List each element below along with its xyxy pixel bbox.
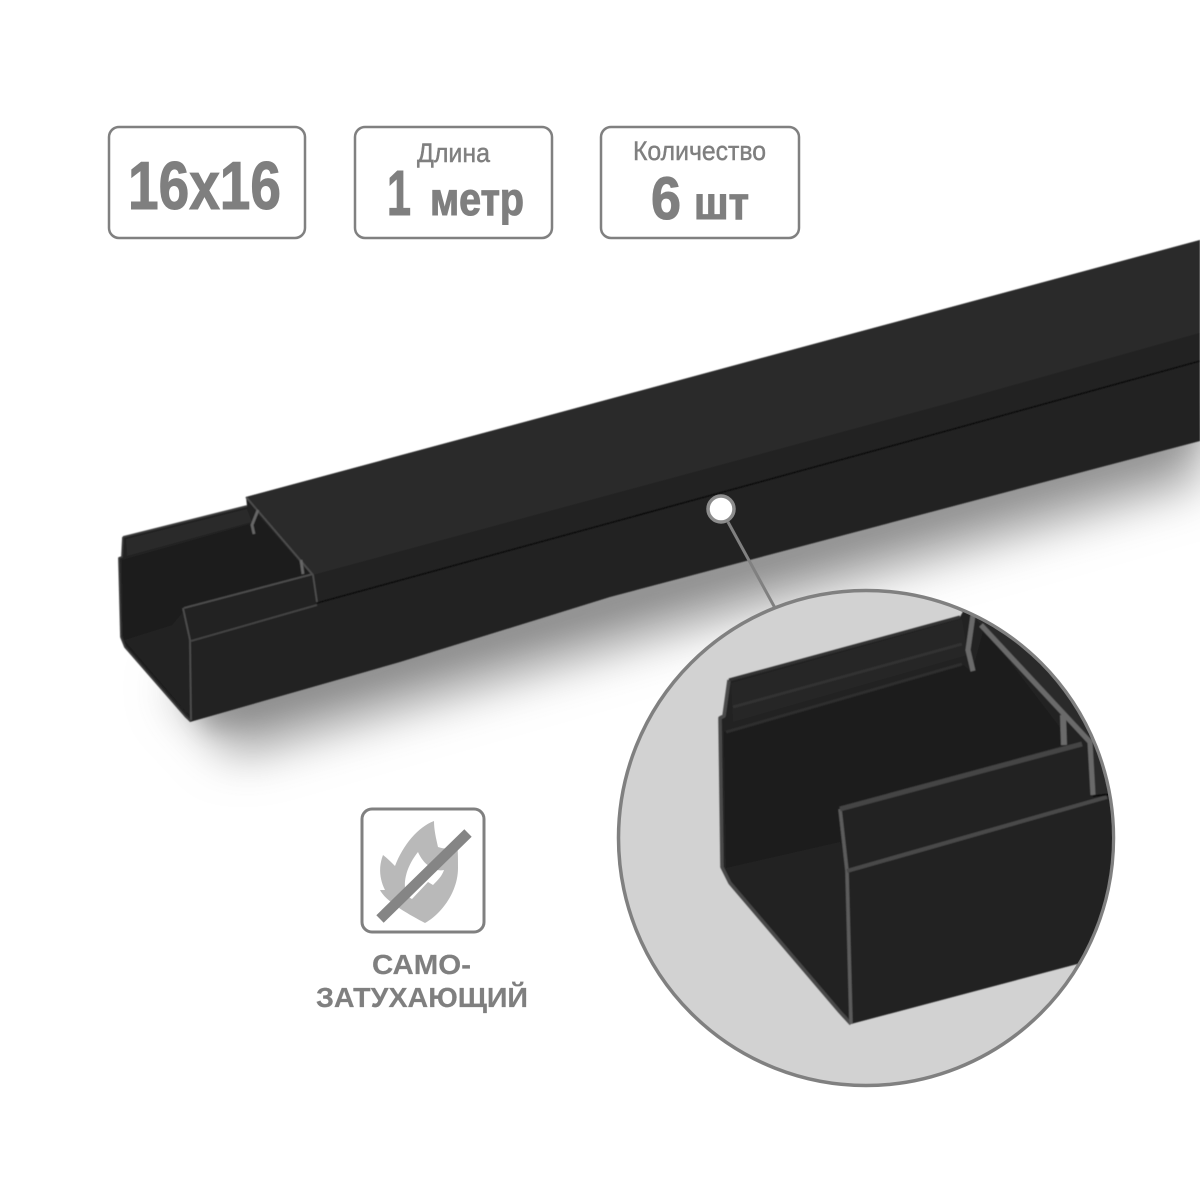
cover top face [246, 240, 1200, 575]
badge: quantity 6 pieces: Количество [633, 136, 766, 166]
badge: length 1 metre [355, 127, 552, 238]
label: self-extinguishing: ЗАТУХАЮЩИЙ [316, 981, 528, 1013]
magnified inset circle [618, 590, 1130, 1086]
channel front lip [183, 574, 317, 641]
black cable channel [119, 240, 1200, 722]
channel groove line [317, 361, 1200, 603]
flame shape [380, 821, 458, 923]
inset cover end piece [982, 622, 1107, 796]
badge: length 1 metre: метр [430, 173, 524, 225]
badge: quantity 6 pieces: 6 [651, 165, 681, 232]
label: self-extinguishing: САМО- [372, 949, 471, 980]
flame inner cutout [405, 852, 444, 899]
badge: size 16x16: 16x16 [128, 148, 281, 224]
inset interior [838, 740, 1060, 823]
inset floor [726, 842, 851, 1020]
inset back wall [731, 619, 968, 722]
channel edge highlights [119, 497, 317, 721]
infographic canvas [108, 126, 1200, 1088]
badge: length 1 metre: Длина [417, 138, 491, 168]
callout leader line [728, 522, 775, 608]
badge: size 16x16 [109, 127, 305, 238]
inset channel profile [720, 606, 1130, 1024]
slash across flame [380, 833, 468, 919]
inset silhouette [720, 606, 1130, 1024]
channel back wall [126, 509, 252, 556]
channel inner floor [124, 612, 191, 716]
channel interior [122, 515, 313, 718]
channel outer silhouette [119, 240, 1200, 722]
badge: length 1 metre: 1 [387, 157, 411, 229]
product shadow [170, 405, 1200, 755]
callout dot [708, 496, 734, 522]
badge: quantity 6 pieces: шт [694, 177, 749, 229]
inset profile highlights [720, 615, 1112, 1024]
icon: self-extinguishing flame [362, 809, 484, 932]
badge: quantity 6 pieces [601, 127, 799, 238]
inset front lip inner face [840, 744, 1093, 871]
cover front face [313, 333, 1200, 602]
label: self-extinguishing [316, 949, 528, 1013]
